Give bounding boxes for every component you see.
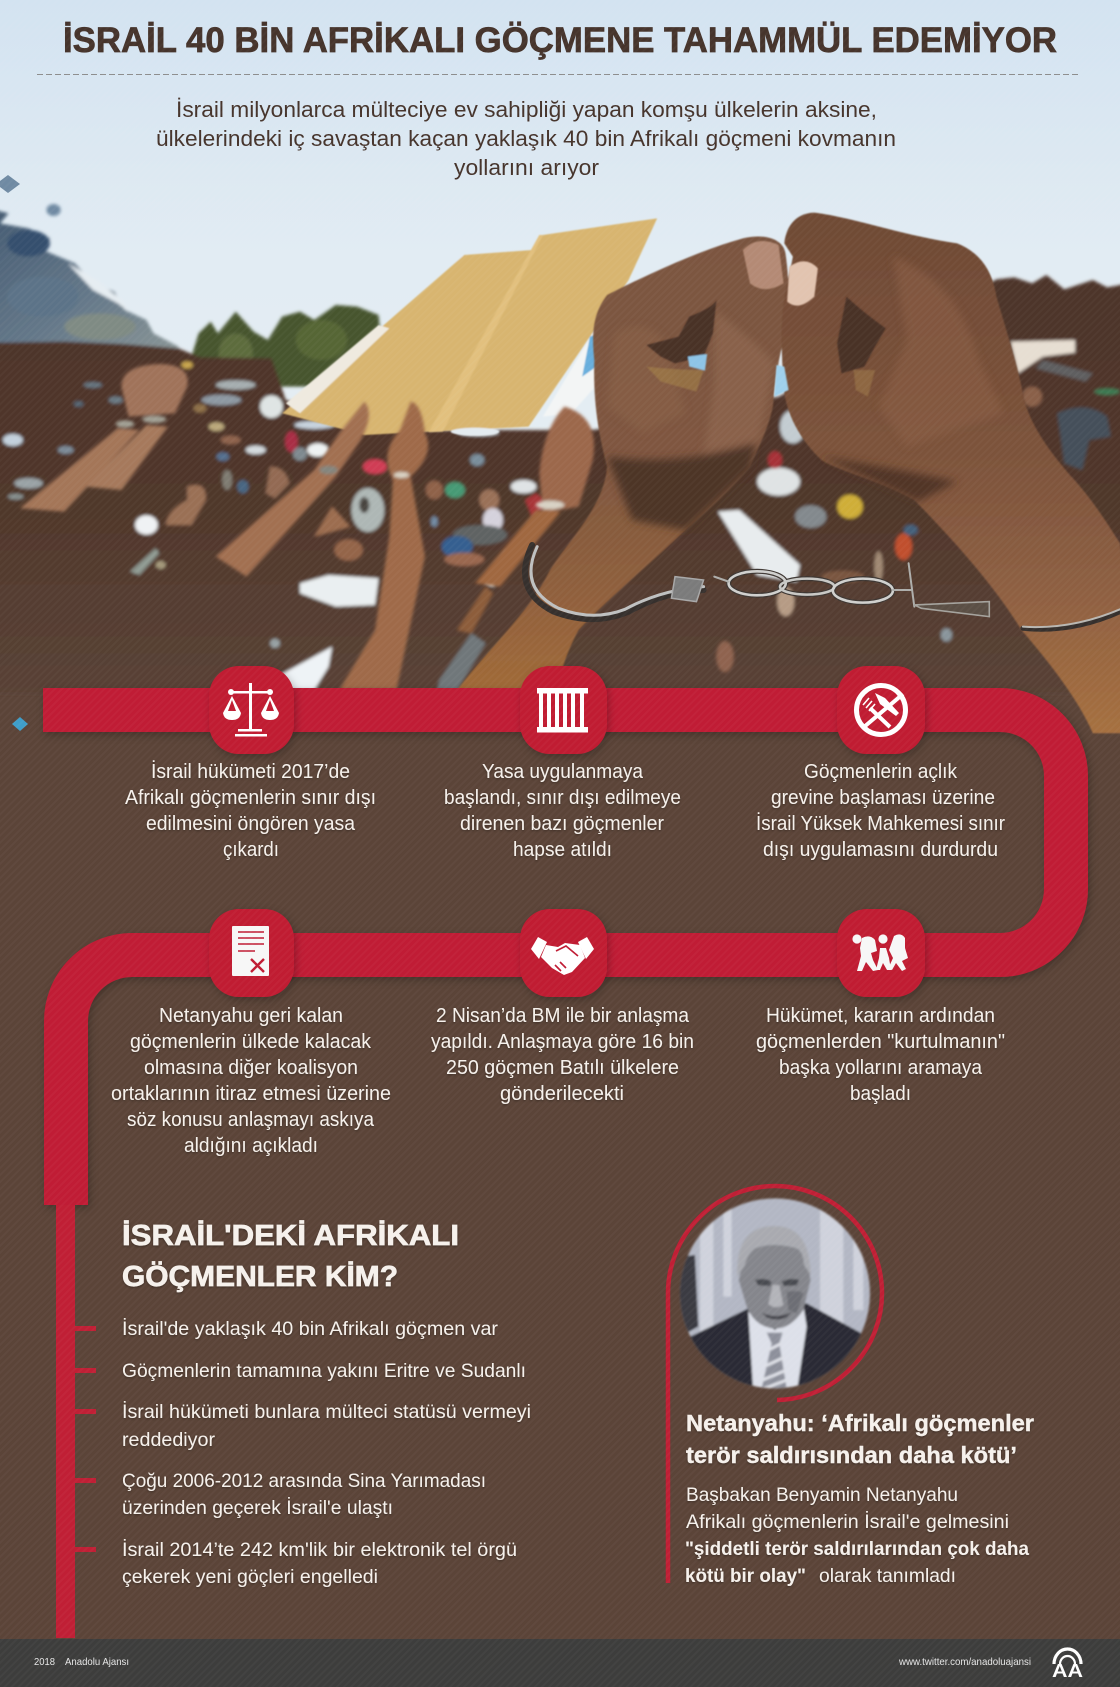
footer credit: 2018 (34, 1656, 55, 1668)
subtitle (156, 97, 896, 180)
photo: cardboard protest sign (282, 218, 657, 436)
text: step 5: gönderilecekti (500, 1083, 624, 1105)
text: step 4: göçmenlerin ülkede kalacak (130, 1031, 372, 1053)
icon plate (209, 666, 294, 754)
text: step 5 (431, 1005, 694, 1105)
red arc and rule (668, 1186, 882, 1583)
quote body: "şiddetli terör saldırılarından çok daha (685, 1538, 1029, 1560)
photo: handcuffed hands (457, 213, 1120, 733)
text: step 3: dışı uygulamasını durdurdu (763, 839, 998, 861)
text: step 5: 2 Nisan’da BM ile bir anlaşma (436, 1005, 690, 1027)
timeline road (43, 710, 1066, 1205)
title: İSRAİL 40 BİN AFRİKALI GÖÇMENE TAHAMMÜL EDEMİYOR (63, 21, 1057, 60)
icon: scales (223, 683, 279, 736)
timeline tail and ticks (56, 1205, 96, 1638)
hand shading (607, 257, 1004, 530)
portrait photo (680, 1196, 872, 1390)
icon: prison bars (537, 688, 588, 732)
text: step 4: olmasına diğer koalisyon (144, 1057, 358, 1079)
text: step 4: söz konusu anlaşmayı askıya (127, 1109, 375, 1131)
quote body (685, 1484, 1029, 1587)
text: step 4 (111, 1005, 391, 1157)
footer bar (0, 1639, 1120, 1687)
text: step 1: çıkardı (223, 839, 279, 861)
text: step 2 (444, 761, 681, 861)
text: step 3: İsrail Yüksek Mahkemesi sınır (756, 812, 1005, 835)
quote body: Afrikalı göçmenlerin İsrail'e gelmesini (686, 1510, 1009, 1533)
icon plate (520, 909, 607, 997)
quote heading (686, 1410, 1034, 1468)
step 4: suspended agreement (111, 909, 391, 1157)
footer credit: www.twitter.com/anadoluajansi (898, 1656, 1031, 1668)
panel: Netanyahu quote (668, 1186, 1034, 1587)
decorative flecks: blue (0, 175, 28, 731)
text: step 2: hapse atıldı (513, 839, 612, 861)
text: step 3: Göçmenlerin açlık (804, 761, 958, 783)
text: step 5: 250 göçmen Batılı ülkelere (446, 1057, 679, 1079)
photo: raised arms in crowd (20, 364, 594, 690)
icon: cancelled document (232, 926, 269, 976)
icon plate (520, 666, 607, 754)
subtitle: yollarını arıyor (454, 155, 599, 180)
text: step 6 (756, 1005, 1005, 1105)
fact list: Çoğu 2006-2012 arasında Sina Yarımadası (122, 1470, 486, 1492)
logo: Anadolu Agency (1052, 1649, 1083, 1681)
step 1: law (125, 666, 376, 861)
text: step 2: başlandı, sınır dışı edilmeye (444, 787, 681, 809)
icon plate (209, 909, 294, 997)
hero photo: protest crowd and handcuffed hands (0, 200, 1120, 733)
step 5: UN deal (431, 909, 694, 1105)
footer credit (34, 1656, 1031, 1668)
text: step 1: Afrikalı göçmenlerin sınır dışı (125, 787, 376, 809)
fact list: İsrail hükümeti bunlara mülteci statüsü vermeyi (122, 1400, 531, 1423)
panel: who are the African migrants (122, 1220, 531, 1588)
text: step 1: İsrail hükümeti 2017’de (151, 760, 350, 783)
text: step 4: Netanyahu geri kalan (159, 1005, 343, 1027)
fact list: İsrail'de yaklaşık 40 bin Afrikalı göçmen var (122, 1317, 499, 1340)
text: step 6: başladı (850, 1083, 911, 1105)
text: step 6: Hükümet, kararın ardından (766, 1005, 995, 1027)
icon: handshake (531, 937, 594, 975)
footer credit: Anadolu Ajansı (65, 1656, 129, 1668)
subtitle: İsrail milyonlarca mülteciye ev sahipliği yapan komşu ülkelerin aksine, (176, 97, 877, 122)
heading (122, 1220, 459, 1293)
text: step 5: yapıldı. Anlaşmaya göre 16 bin (431, 1031, 694, 1053)
icon: crossed fork and knife (856, 686, 906, 734)
text: step 6: başka yollarını aramaya (779, 1057, 983, 1079)
text: step 2: Yasa uygulanmaya (482, 761, 644, 783)
quote body: Başbakan Benyamin Netanyahu (686, 1484, 958, 1506)
subtitle: ülkelerindeki iç savaştan kaçan yaklaşık 40 bin Afrikalı göçmeni kovmanın (156, 126, 896, 151)
fact list: İsrail 2014’te 242 km'lik bir elektronik tel örgü (122, 1538, 517, 1561)
text: step 2: direnen bazı göçmenler (460, 813, 664, 835)
step 3: hunger strike (756, 666, 1005, 861)
icon: migrant family (852, 934, 908, 971)
fact list: üzerinden geçerek İsrail'e ulaştı (122, 1496, 393, 1519)
logo: Anadolu Agency: AA (1052, 1661, 1083, 1681)
step 6: other ways (756, 909, 1005, 1105)
quote body: kötü bir olay" (685, 1565, 806, 1587)
fact list: çekerek yeni göçleri engelledi (122, 1566, 378, 1588)
text: step 4: aldığını açıkladı (184, 1135, 318, 1157)
quote body: olarak tanımladı (819, 1565, 956, 1587)
icon plate (837, 909, 925, 997)
text: step 3: grevine başlaması üzerine (771, 787, 995, 809)
text: step 1 (125, 760, 376, 861)
fact list: Göçmenlerin tamamına yakını Eritre ve Sudanlı (122, 1360, 526, 1382)
quote heading: terör saldırısından daha kötü’ (686, 1442, 1017, 1468)
text: step 1: edilmesini öngören yasa (146, 813, 356, 835)
icon plate (837, 666, 925, 754)
quote heading: Netanyahu: ‘Afrikalı göçmenler (686, 1410, 1034, 1436)
text: step 4: ortaklarının itiraz etmesi üzerine (111, 1083, 391, 1105)
text: step 6: göçmenlerden "kurtulmanın" (756, 1031, 1005, 1053)
photo: handcuffs and chain (525, 545, 1120, 629)
step 2: prison (444, 666, 681, 861)
heading: GÖÇMENLER KİM? (122, 1260, 398, 1293)
photo background: smoke, trees and crowd (0, 200, 1120, 693)
text: step 3 (756, 761, 1005, 861)
fact list: reddediyor (122, 1429, 216, 1451)
fact list (122, 1317, 531, 1588)
heading: İSRAİL'DEKİ AFRİKALI (122, 1220, 459, 1252)
hand silhouettes (457, 213, 1120, 733)
finger gaps and nails (646, 241, 886, 397)
